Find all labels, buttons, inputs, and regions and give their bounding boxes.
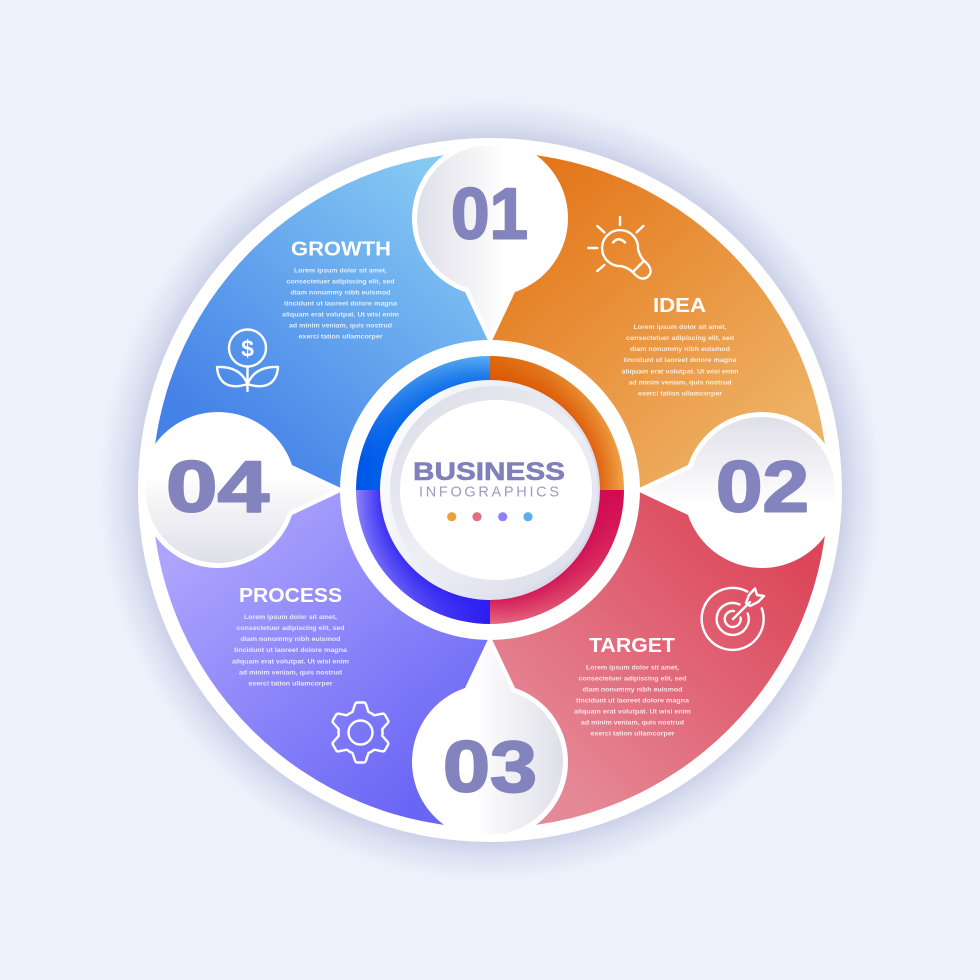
number 02: 02 (716, 448, 809, 528)
heading: target: TARGET (589, 634, 675, 657)
body text: target: ad minim veniam, quis nostrud (581, 720, 684, 727)
process content (232, 584, 392, 762)
body text: target: tincidunt ut laoreet dolore magna (576, 698, 689, 704)
number 04: 04 (166, 448, 269, 528)
body text: process: ad minim veniam, quis nostrud (239, 669, 342, 676)
body text: process: Lorem ipsum dolor sit amet, (244, 614, 337, 621)
body text: process: consectetuer adipiscing elit, sed (236, 625, 344, 632)
four coloured dots (447, 512, 533, 521)
body text: growth: diam nonummy nibh euismod (290, 289, 390, 296)
body text: growth: aliquam erat volutpat. Ut wisi enim (282, 312, 399, 319)
body text: idea: ad minim veniam, quis nostrud (628, 379, 732, 386)
panel: growth segment (152, 152, 490, 490)
body text: growth: tincidunt ut laoreet dolore magna (284, 300, 397, 308)
heading: idea: IDEA (653, 294, 706, 317)
marker 03 (412, 635, 568, 840)
target content (574, 588, 764, 738)
panel: idea segment (490, 152, 828, 490)
center title: BUSINESS (413, 458, 565, 486)
growth content (217, 238, 399, 391)
heading: process: PROCESS (239, 584, 342, 607)
soft shadow behind wheel (100, 100, 880, 880)
number 01: 01 (451, 174, 528, 254)
body text: process: exerci tation ullamcorper (248, 680, 333, 687)
body text: growth: Lorem ipsum dolor sit amet, (294, 267, 387, 274)
body text: target: Lorem ipsum dolor sit amet, (586, 664, 679, 671)
marker 02 (635, 412, 840, 568)
body text: target (574, 664, 691, 738)
number 03: 03 (443, 728, 537, 808)
marker 01 (412, 140, 568, 345)
body text: target: consectetuer adipiscing elit, sed (578, 675, 686, 682)
panel: target segment (490, 490, 828, 828)
icon: money plant: $ (241, 336, 254, 362)
body text: idea: diam nonummy nibh euismod (630, 346, 730, 353)
body text: growth (282, 267, 399, 341)
body text: process: tincidunt ut laoreet dolore magna (234, 647, 347, 654)
icon: light bulb (588, 217, 661, 289)
panel: process segment (152, 490, 490, 828)
icon: target with arrow (702, 588, 764, 650)
body text: idea (622, 324, 739, 397)
central hub (340, 340, 640, 640)
body text: idea: exerci tation ullamcorper (638, 390, 722, 397)
body text: growth: ad minim veniam, quis nostrud (289, 323, 392, 330)
body text: idea: tincidunt ut laoreet dolore magna (624, 357, 737, 364)
center subtitle: INFOGRAPHICS (419, 485, 559, 501)
outer white disc (138, 138, 842, 842)
body text: growth: consectetuer adipiscing elit, sed (286, 278, 394, 285)
body text: target: diam nonummy nibh euismod (582, 686, 682, 693)
icon: gear (329, 702, 392, 762)
heading: growth: GROWTH (291, 238, 391, 261)
body text: idea: consectetuer adipiscing elit, sed (626, 335, 734, 342)
icon: money plant (217, 330, 278, 391)
body text: process: diam nonummy nibh euismod (240, 636, 340, 643)
body text: target: exerci tation ullamcorper (590, 731, 675, 738)
body text: process: aliquam erat volutpat. Ut wisi enim (232, 658, 349, 665)
body text: growth: exerci tation ullamcorper (298, 334, 383, 341)
body text: idea: aliquam erat volutpat. Ut wisi enim (622, 368, 739, 375)
body text: process (232, 614, 349, 687)
body text: target: aliquam erat volutpat. Ut wisi enim (574, 709, 691, 716)
marker 04 (140, 412, 345, 568)
body text: idea: Lorem ipsum dolor sit amet, (634, 324, 727, 331)
idea content (588, 217, 739, 397)
